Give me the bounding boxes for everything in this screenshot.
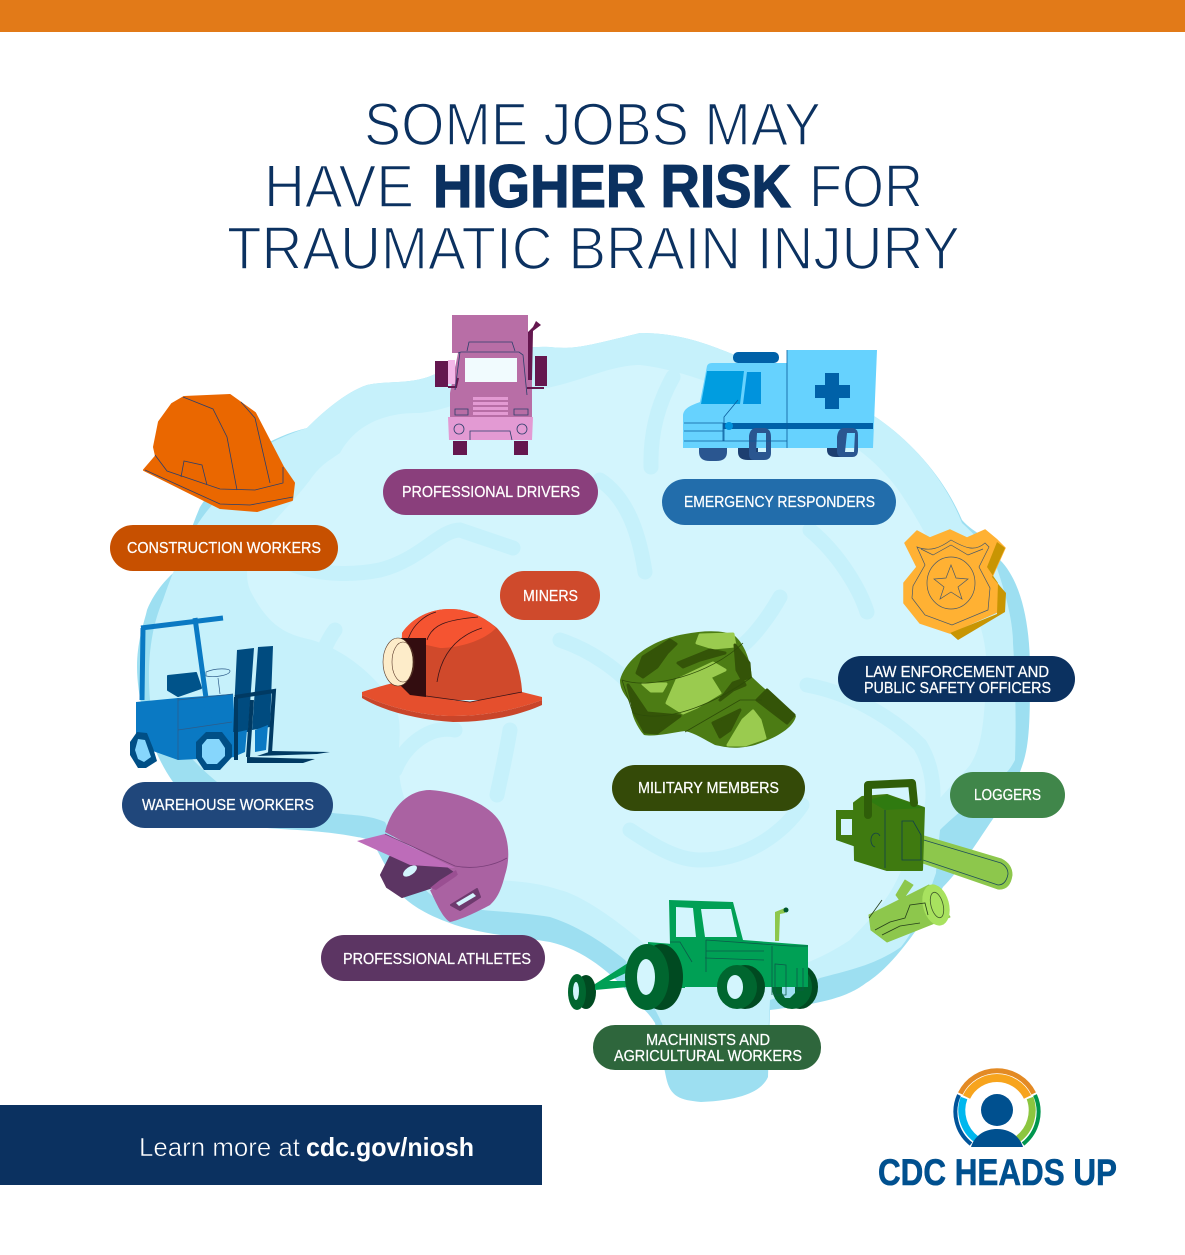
pill: law enforcement: LAW ENFORCEMENT AND (865, 664, 1049, 681)
pill: law enforcement (838, 656, 1075, 702)
pill: military members (612, 765, 805, 811)
pill: machinists and agricultural workers: AGRICULTURAL WORKERS (614, 1048, 802, 1065)
icon: chainsaw and log (836, 783, 1011, 942)
icon: construction hard hat (144, 395, 294, 511)
pill: emergency responders (662, 479, 896, 525)
logo: CDC Heads Up (878, 1071, 1117, 1193)
icon: police badge (904, 530, 1006, 640)
pill: professional athletes (321, 935, 545, 981)
title: SOME JOBS MAY (364, 91, 821, 158)
title: TRAUMATIC BRAIN INJURY (227, 215, 960, 282)
brain illustration background (137, 333, 1030, 1102)
call to action banner: cdc.gov/niosh (306, 1132, 474, 1162)
pill: miners: MINERS (523, 588, 578, 605)
call to action banner: Learn more at (139, 1132, 301, 1162)
pill: loggers (950, 772, 1065, 818)
icon: athlete helmet (357, 790, 508, 922)
title: HAVE (264, 153, 414, 220)
pill: professional athletes: PROFESSIONAL ATHLETES (343, 951, 531, 968)
pill: construction workers (110, 525, 338, 571)
pill: professional drivers (383, 469, 598, 515)
pill: warehouse workers: WAREHOUSE WORKERS (142, 797, 314, 814)
icon: miner helmet (362, 609, 542, 722)
title (227, 91, 960, 282)
pill: miners (500, 571, 600, 620)
title: FOR (809, 153, 923, 220)
pill: loggers: LOGGERS (974, 787, 1041, 804)
pill: warehouse workers (122, 782, 333, 828)
icon: camouflage cap (620, 631, 796, 748)
pill: professional drivers: PROFESSIONAL DRIVERS (402, 484, 580, 501)
pill: machinists and agricultural workers (593, 1025, 821, 1070)
pill: law enforcement: PUBLIC SAFETY OFFICERS (864, 680, 1051, 697)
top orange bar (0, 0, 1185, 32)
pill: machinists and agricultural workers: MACHINISTS AND (646, 1032, 770, 1049)
pill: military members: MILITARY MEMBERS (638, 780, 779, 797)
logo: CDC Heads Up: CDC HEADS UP (878, 1152, 1117, 1193)
title: HIGHER RISK (433, 153, 791, 220)
icon: ambulance (683, 350, 877, 461)
pill: emergency responders: EMERGENCY RESPONDERS (684, 494, 875, 511)
icon: forklift (130, 618, 330, 770)
icon: tractor (568, 900, 818, 1010)
call to action banner (0, 1105, 542, 1185)
pill: construction workers: CONSTRUCTION WORKERS (127, 540, 321, 557)
icon: truck (435, 315, 547, 455)
